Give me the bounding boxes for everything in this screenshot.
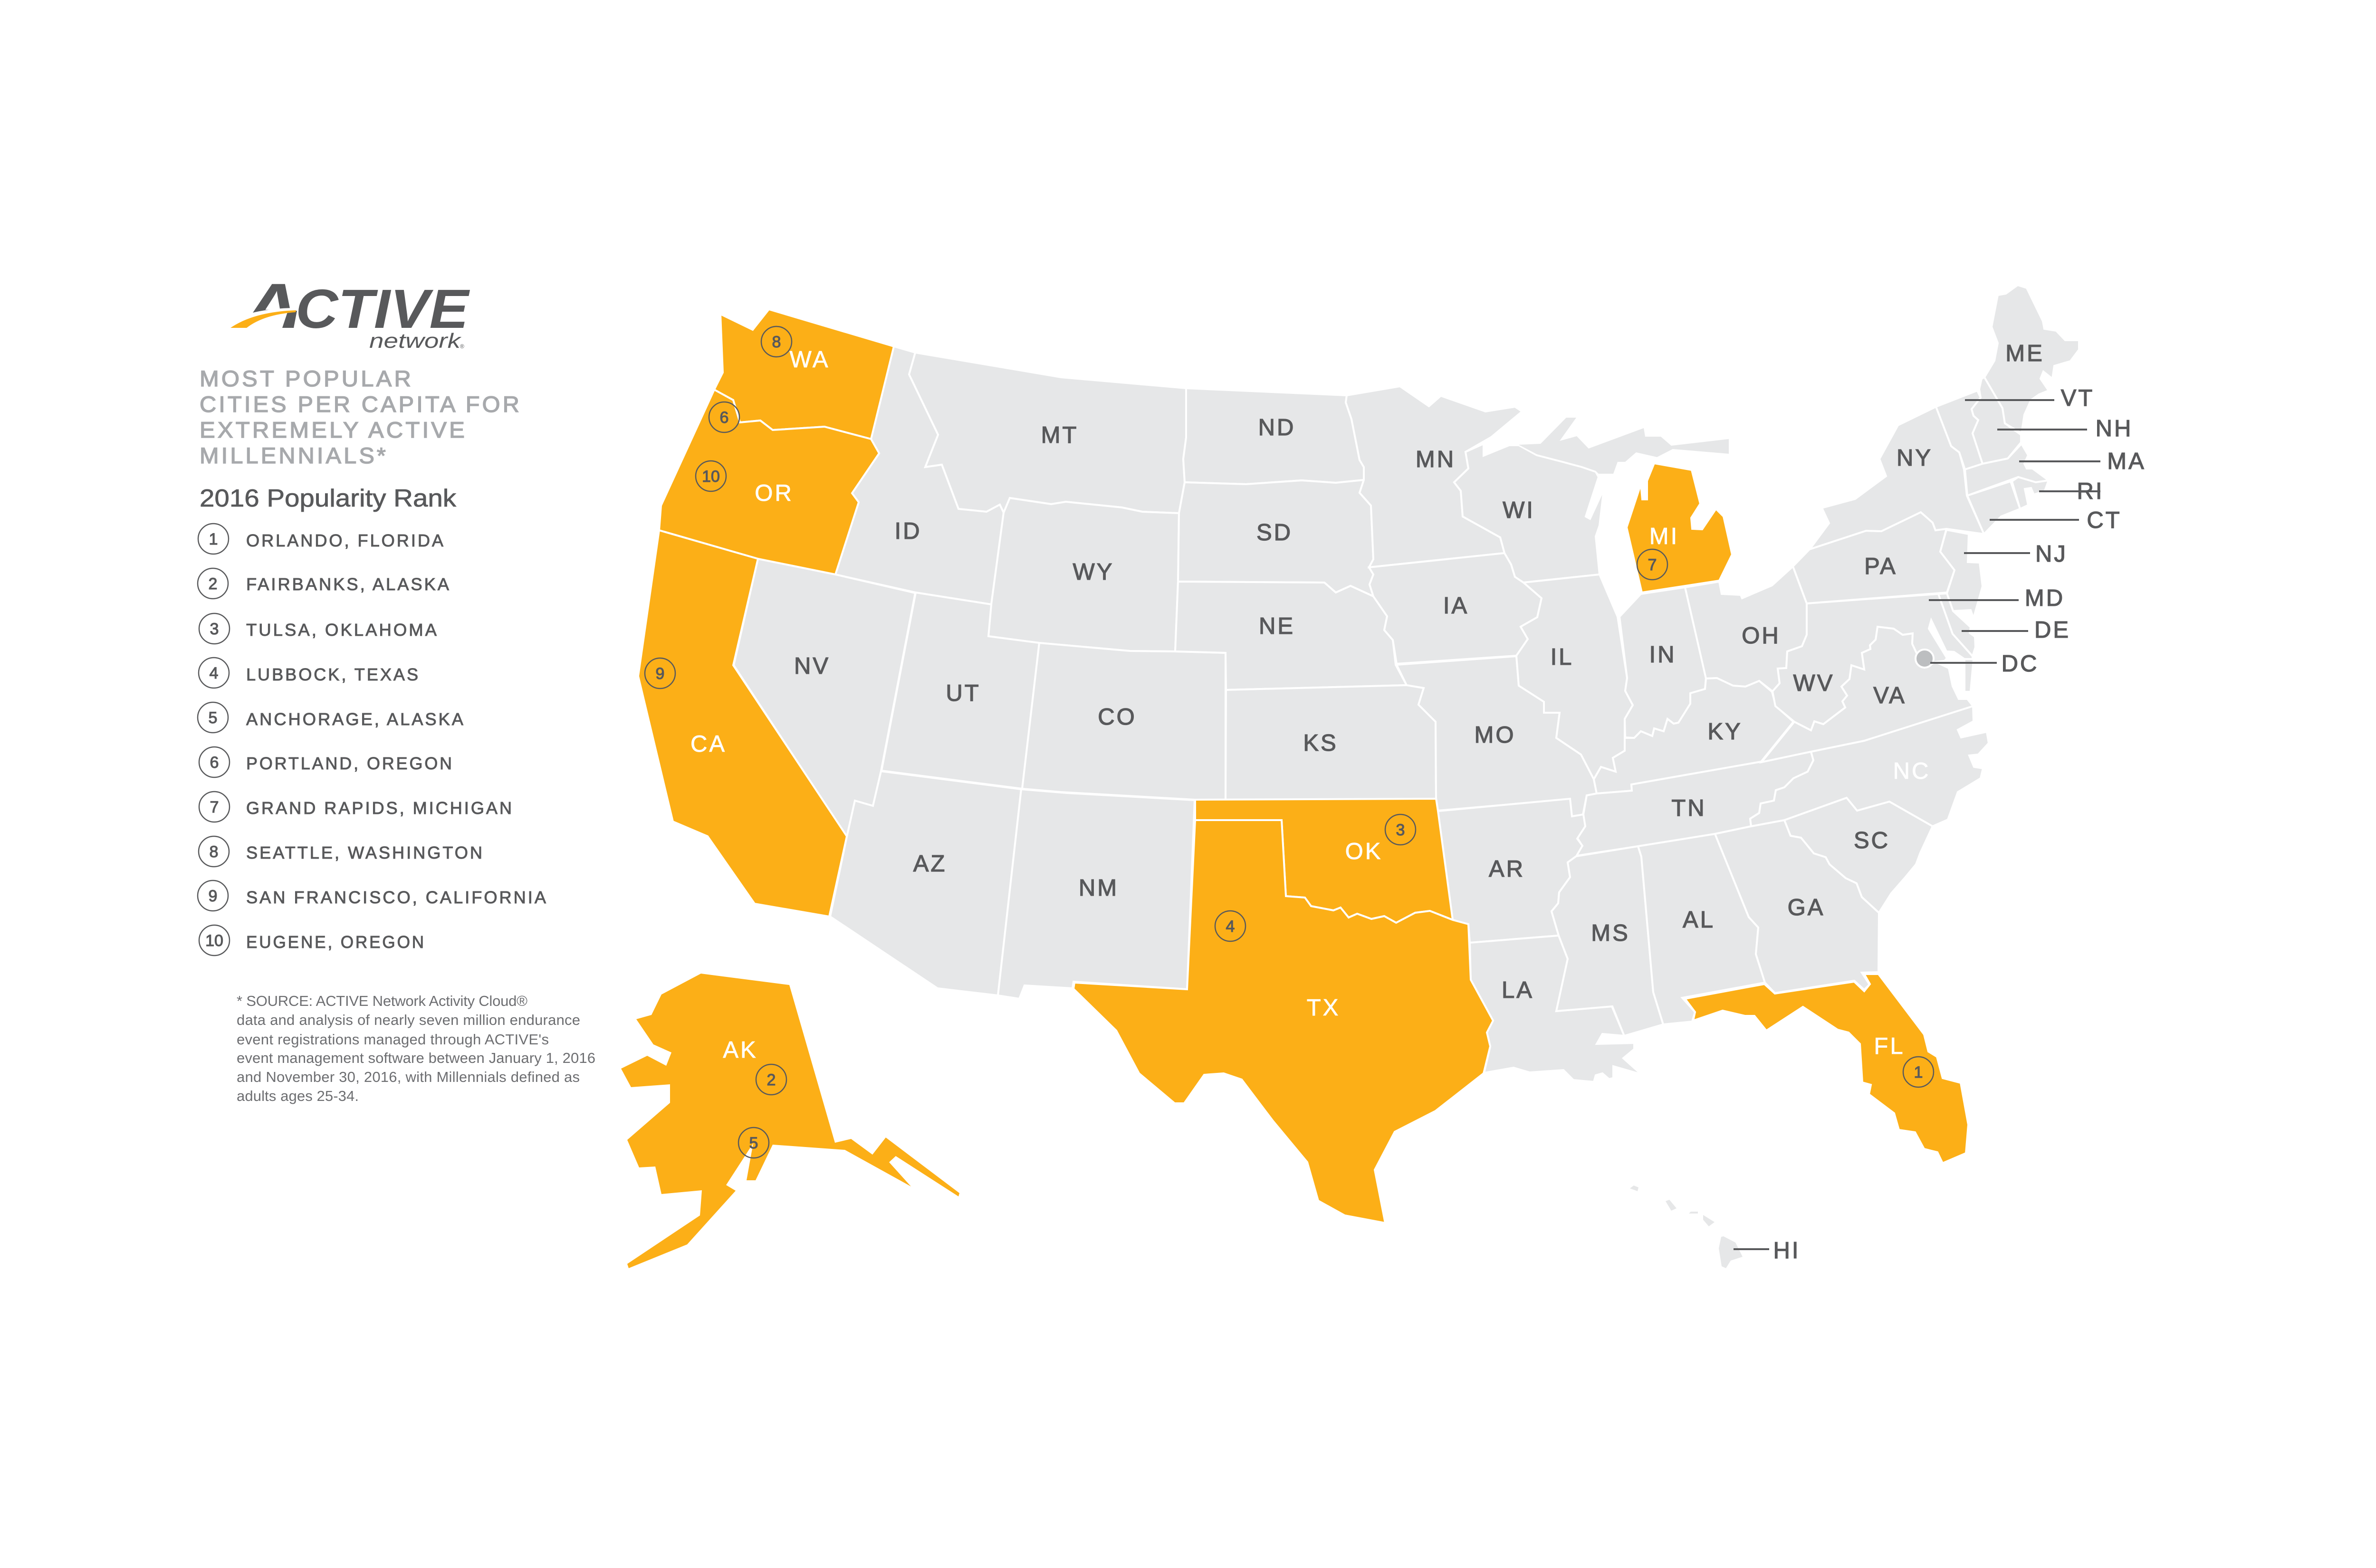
legend item 4: LUBBOCK, TEXAS (246, 665, 420, 684)
state: WY (988, 498, 1179, 651)
state: CA highlighted (638, 530, 847, 917)
state abbreviation labels: AK (723, 1037, 758, 1063)
state abbreviation labels: SC (1854, 828, 1890, 853)
rank 10 Eugene (696, 461, 726, 491)
state abbreviation labels: IA (1443, 593, 1469, 619)
state abbreviation labels: MT (1041, 422, 1078, 448)
state abbreviation labels: CO (1098, 704, 1137, 730)
legend item 10: EUGENE, OREGON (246, 932, 426, 952)
state abbreviation labels: FL (1874, 1033, 1905, 1059)
state: AL (1638, 834, 1765, 1024)
state: VA (1762, 627, 1973, 762)
legend item 1 (198, 524, 445, 554)
legend: ranked city list (198, 524, 548, 956)
state abbreviation labels: VT (2061, 385, 2094, 411)
state: CT (1967, 481, 2020, 534)
logo: ACTIVE network: network (369, 329, 461, 353)
legend item 7 (199, 792, 514, 822)
legend item 9 (198, 880, 548, 911)
state abbreviation labels: AL (1683, 907, 1715, 933)
state abbreviation labels (690, 341, 2146, 1263)
state: MO (1397, 656, 1597, 817)
state abbreviation labels: NH (2096, 416, 2133, 441)
legend item 8: SEATTLE, WASHINGTON (246, 843, 484, 862)
state: MI lower peninsula highlighted (1627, 463, 1732, 593)
state: CO (1022, 643, 1226, 800)
state: HI islands (1630, 1186, 1743, 1268)
rank 1 Orlando (1903, 1057, 1934, 1087)
state abbreviation labels: WA (789, 347, 830, 373)
state: NH (1972, 377, 2021, 464)
rank 6 Portland: 6 (720, 409, 728, 427)
source footnote: event management software between January 1, 2016 (237, 1050, 595, 1066)
state abbreviation labels: CA (690, 731, 727, 757)
legend item 10: 10 (205, 932, 223, 950)
source footnote (237, 993, 595, 1104)
state: UT (881, 593, 1039, 789)
state: TX highlighted (1073, 820, 1493, 1223)
state: MA (1965, 444, 2049, 496)
state abbreviation labels: GA (1788, 895, 1825, 920)
legend item 2: FAIRBANKS, ALASKA (246, 574, 451, 594)
state: MN (1346, 386, 1522, 567)
rank 6 Portland (709, 402, 739, 432)
rank 7 Grand Rapids (1637, 549, 1667, 580)
logo: ACTIVE network: ® (460, 343, 464, 350)
heading: most popular cities: MOST POPULAR (200, 366, 413, 391)
state: OR highlighted (659, 390, 879, 574)
legend item 7: GRAND RAPIDS, MICHIGAN (246, 798, 514, 818)
marker: DC (1916, 650, 1934, 668)
heading: most popular cities: CITIES PER CAPITA FOR (200, 392, 522, 417)
state abbreviation labels: MI (1649, 524, 1679, 549)
state: RI (2012, 477, 2049, 509)
legend item 1: 1 (209, 530, 218, 548)
state abbreviation labels: NV (794, 653, 830, 679)
state: ID (835, 346, 1004, 604)
state abbreviation labels: DE (2034, 617, 2070, 643)
source footnote: * SOURCE: ACTIVE Network Activity Cloud® (237, 993, 527, 1009)
legend item 10 (199, 925, 426, 956)
legend item 8 (199, 836, 484, 867)
state: SC (1784, 798, 1933, 913)
legend item 5 (198, 702, 465, 733)
legend item 6: PORTLAND, OREGON (246, 754, 454, 773)
rank 4 Lubbock: 4 (1226, 918, 1235, 936)
state: NJ (1940, 530, 1983, 618)
rank 3 Tulsa: 3 (1396, 821, 1405, 839)
state abbreviation labels: NE (1259, 613, 1295, 639)
legend item 4: 4 (210, 664, 218, 682)
state: KS (1226, 685, 1436, 801)
rank 3 Tulsa (1385, 814, 1416, 845)
legend item 4 (199, 658, 420, 688)
state abbreviation labels: OK (1345, 839, 1382, 864)
state abbreviation labels: SD (1256, 520, 1293, 545)
state abbreviation labels: UT (946, 680, 981, 706)
state: VA eastern shore (1965, 659, 1973, 691)
leader lines for small states (1734, 400, 2100, 1249)
legend item 6: 6 (210, 754, 219, 772)
state abbreviation labels: MS (1591, 920, 1630, 946)
state: NV (734, 559, 915, 837)
state: SD (1178, 480, 1373, 596)
state abbreviation labels: WV (1793, 670, 1834, 696)
logo: ACTIVE network: CTIVE (296, 278, 470, 340)
state abbreviation labels: DC (2002, 651, 2039, 677)
source footnote: event registrations managed through ACTIVE's (237, 1031, 549, 1048)
rank 8 Seattle (761, 326, 792, 357)
state: OK highlighted (1195, 799, 1453, 923)
state abbreviation labels: WY (1073, 559, 1114, 585)
state: KY (1594, 678, 1793, 794)
state: AZ (830, 771, 1021, 995)
rank 4 Lubbock (1215, 911, 1245, 941)
state abbreviation labels: TX (1307, 995, 1340, 1021)
state abbreviation labels: PA (1864, 554, 1897, 579)
rank 8 Seattle: 8 (772, 333, 781, 351)
state abbreviation labels: NY (1897, 445, 1933, 471)
state abbreviation labels: AR (1489, 856, 1525, 882)
state: LA (1470, 936, 1641, 1082)
legend item 3: 3 (210, 620, 219, 638)
logo: ACTIVE network: A (242, 271, 299, 342)
state abbreviation labels: TN (1671, 795, 1706, 821)
state: AK highlighted (621, 974, 959, 1268)
legend item 3: TULSA, OKLAHOMA (246, 620, 439, 640)
state: NC (1750, 706, 1989, 826)
rank 2 Fairbanks: 2 (767, 1071, 776, 1089)
state: AR (1438, 799, 1585, 943)
state: TN (1577, 752, 1813, 856)
rank 5 Anchorage: 5 (749, 1134, 758, 1152)
state abbreviation labels: NJ (2035, 541, 2068, 567)
state abbreviation labels: ME (2005, 341, 2044, 366)
state: MS (1552, 846, 1663, 1036)
state abbreviation labels: MD (2025, 585, 2065, 611)
state abbreviation labels: OH (1742, 623, 1781, 649)
subheading: popularity rank: 2016 Popularity Rank (200, 485, 457, 512)
legend item 9: SAN FRANCISCO, CALIFORNIA (246, 888, 548, 907)
legend item 5: ANCHORAGE, ALASKA (246, 709, 465, 729)
state: NE (1175, 582, 1407, 690)
state abbreviation labels: NM (1079, 875, 1119, 901)
state: IA (1369, 553, 1542, 664)
state abbreviation labels: IL (1551, 644, 1573, 670)
state: ME (1984, 285, 2079, 433)
state abbreviation labels: MO (1475, 722, 1515, 748)
state abbreviation labels: NC (1893, 758, 1930, 784)
state: VT (1936, 391, 1983, 469)
state abbreviation labels: CT (2087, 507, 2122, 533)
legend item 9: 9 (209, 887, 217, 905)
state abbreviation labels: VA (1873, 683, 1907, 708)
state abbreviation labels: AZ (913, 851, 947, 877)
state abbreviation labels: ID (894, 518, 922, 544)
rank 2 Fairbanks (756, 1064, 786, 1095)
legend item 1: ORLANDO, FLORIDA (246, 531, 445, 550)
legend item 7: 7 (210, 798, 219, 816)
state: MT (909, 353, 1186, 513)
rank 5 Anchorage (738, 1128, 769, 1158)
state: WA highlighted (714, 309, 894, 439)
state: PA (1793, 512, 1954, 603)
legend item 2 (198, 568, 451, 599)
state: WI (1454, 444, 1604, 583)
state: MI upper peninsula (1519, 418, 1729, 474)
legend item 2: 2 (209, 575, 217, 593)
rank 10 Eugene: 10 (702, 468, 720, 486)
legend item 8: 8 (210, 843, 218, 861)
state: IL (1516, 574, 1633, 779)
legend item 5: 5 (209, 709, 217, 727)
rank markers on map (645, 326, 1934, 1158)
state abbreviation labels: MN (1416, 447, 1456, 472)
source footnote: data and analysis of nearly seven million endurance (237, 1012, 580, 1028)
state: WV and MD (1772, 594, 1973, 730)
state abbreviation labels: ND (1258, 415, 1295, 440)
legend item 6 (199, 747, 454, 777)
heading: most popular cities: MILLENNIALS* (200, 443, 388, 468)
state: ND (1183, 388, 1364, 484)
state abbreviation labels: WI (1503, 497, 1535, 523)
state: DE (1938, 593, 1975, 656)
rank 9 San Francisco (645, 658, 675, 688)
state abbreviation labels: MA (2107, 449, 2146, 474)
heading: most popular cities (200, 366, 522, 468)
rank 1 Orlando: 1 (1914, 1063, 1923, 1081)
state: OH (1685, 566, 1807, 691)
state abbreviation labels: LA (1502, 977, 1534, 1003)
legend item 3 (199, 613, 439, 644)
source footnote: adults ages 25-34. (237, 1088, 359, 1104)
state: IN (1619, 587, 1706, 738)
rank 9 San Francisco: 9 (656, 665, 664, 683)
state abbreviation labels: RI (2077, 478, 2104, 504)
logo: ACTIVE network (223, 271, 470, 353)
state abbreviation labels: KY (1707, 719, 1743, 745)
state abbreviation labels: KS (1303, 730, 1338, 756)
source footnote: and November 30, 2016, with Millennials defined as (237, 1069, 580, 1085)
state abbreviation labels: OR (755, 480, 794, 506)
rank 7 Grand Rapids: 7 (1648, 556, 1657, 574)
state abbreviation labels: HI (1773, 1238, 1800, 1263)
state: GA (1715, 820, 1879, 993)
map: United States (621, 285, 2079, 1268)
state: NY (1810, 407, 1984, 549)
state: NM (998, 789, 1195, 999)
state: FL highlighted (1685, 974, 1968, 1163)
state abbreviation labels: IN (1649, 642, 1677, 668)
heading: most popular cities: EXTREMELY ACTIVE (200, 417, 467, 442)
